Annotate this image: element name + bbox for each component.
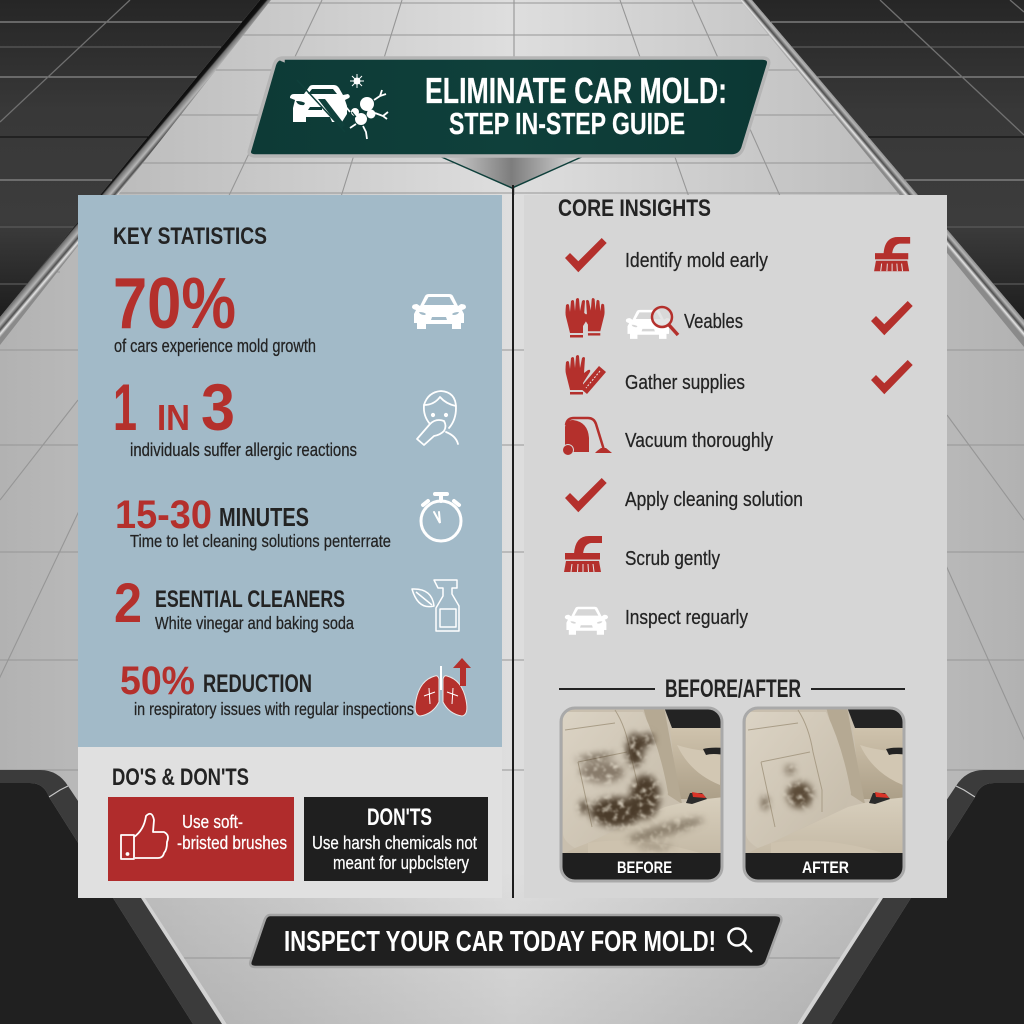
insight: apply cleaning solution: Apply cleaning solution xyxy=(625,489,803,511)
title banner: STEP IN-STEP GUIDE xyxy=(449,106,685,141)
don't card: meant for upbclstery xyxy=(333,852,470,873)
background: dark panel top left xyxy=(0,0,271,345)
stat: 70%: 70% xyxy=(113,264,236,344)
stat: 70%: of cars experience mold growth xyxy=(114,336,316,356)
background: dark panel bottom left xyxy=(0,770,227,1024)
stat: 2 essential cleaners: ESENTIAL CLEANERS xyxy=(155,586,345,613)
insight: identify mold early: Identify mold early xyxy=(625,250,768,272)
photo: before: BEFORE xyxy=(617,858,672,877)
insight: vacuum thoroughly: Vacuum thoroughly xyxy=(625,430,773,452)
don't card: Use harsh chemicals not xyxy=(312,832,477,853)
don't card: DON'TS xyxy=(367,804,432,831)
stat: 70% xyxy=(113,264,466,356)
stat: 15-30 minutes: MINUTES xyxy=(219,502,309,532)
center divider xyxy=(512,185,514,898)
title banner: ELIMINATE CAR MOLD: xyxy=(425,70,727,111)
stat: 2 essential cleaners: 2 xyxy=(114,571,142,634)
call to action banner: INSPECT YOUR CAR TODAY FOR MOLD! xyxy=(284,926,716,958)
icon: spray bottle and leaf xyxy=(412,580,459,631)
insight: gather supplies: Gather supplies xyxy=(625,372,745,394)
insight: identify mold early xyxy=(565,237,910,272)
stat: 50% reduction: REDUCTION xyxy=(203,670,312,698)
panel: key statistics xyxy=(78,195,502,747)
background: dark panel top right xyxy=(740,0,1024,347)
panel: core insights xyxy=(524,195,947,898)
stat: 1 in 3: 3 xyxy=(201,370,235,444)
icon: person covering mouth xyxy=(417,391,458,445)
do card xyxy=(108,797,294,881)
stat: 1 in 3: individuals suffer allergic reactions xyxy=(130,439,357,460)
stat: 15-30 minutes: Time to let cleaning solutions penterrate xyxy=(130,531,391,551)
before/after heading: BEFORE/AFTER xyxy=(665,675,801,703)
stat: 1 in 3: 1 xyxy=(113,370,137,444)
stat: 15-30 minutes xyxy=(115,493,461,551)
insight: scrub gently xyxy=(564,536,720,572)
icon: stopwatch xyxy=(421,494,461,541)
insight: apply cleaning solution xyxy=(565,478,803,512)
don't card xyxy=(304,797,488,881)
panel: do's and don'ts: DO'S & DON'TS xyxy=(112,764,249,791)
insight: gather supplies xyxy=(566,355,913,394)
do card: Use soft- xyxy=(182,811,243,832)
photo: after: AFTER xyxy=(802,858,849,877)
stat: 2 essential cleaners: White vinegar and baking soda xyxy=(155,613,354,633)
icon: thumbs up xyxy=(121,814,168,859)
insight: inspect regularly: Inspect reguarly xyxy=(625,607,748,629)
background: dark panel bottom right xyxy=(797,770,1024,1024)
stat: 50% reduction: in respiratory issues with regular inspections xyxy=(134,699,414,719)
insight: vehicles xyxy=(566,298,913,339)
panel: core insights: CORE INSIGHTS xyxy=(558,195,711,222)
stat: 15-30 minutes: 15-30 xyxy=(115,493,212,537)
stat: 1 in 3: IN xyxy=(157,397,190,438)
insight: scrub gently: Scrub gently xyxy=(625,548,720,570)
icon: magnifier xyxy=(728,928,752,952)
insight: vehicles: Veables xyxy=(684,311,743,333)
title banner xyxy=(249,58,769,188)
insight: inspect regularly xyxy=(565,607,748,635)
photo: before xyxy=(560,707,725,882)
stat: 1 in 3 xyxy=(113,370,458,460)
call to action banner xyxy=(250,915,781,967)
stat: 2 essential cleaners xyxy=(114,571,459,634)
stat: 50% reduction xyxy=(120,658,471,719)
icon: lungs with arrow xyxy=(415,658,471,716)
panel: do's and don'ts xyxy=(78,747,502,898)
panel: key statistics: KEY STATISTICS xyxy=(113,223,267,250)
do card: -bristed brushes xyxy=(177,832,287,853)
icon: car with mold xyxy=(290,74,388,139)
stat: 50% reduction: 50% xyxy=(120,659,195,703)
insight: vacuum thoroughly xyxy=(562,418,773,456)
photo: after xyxy=(743,707,908,882)
